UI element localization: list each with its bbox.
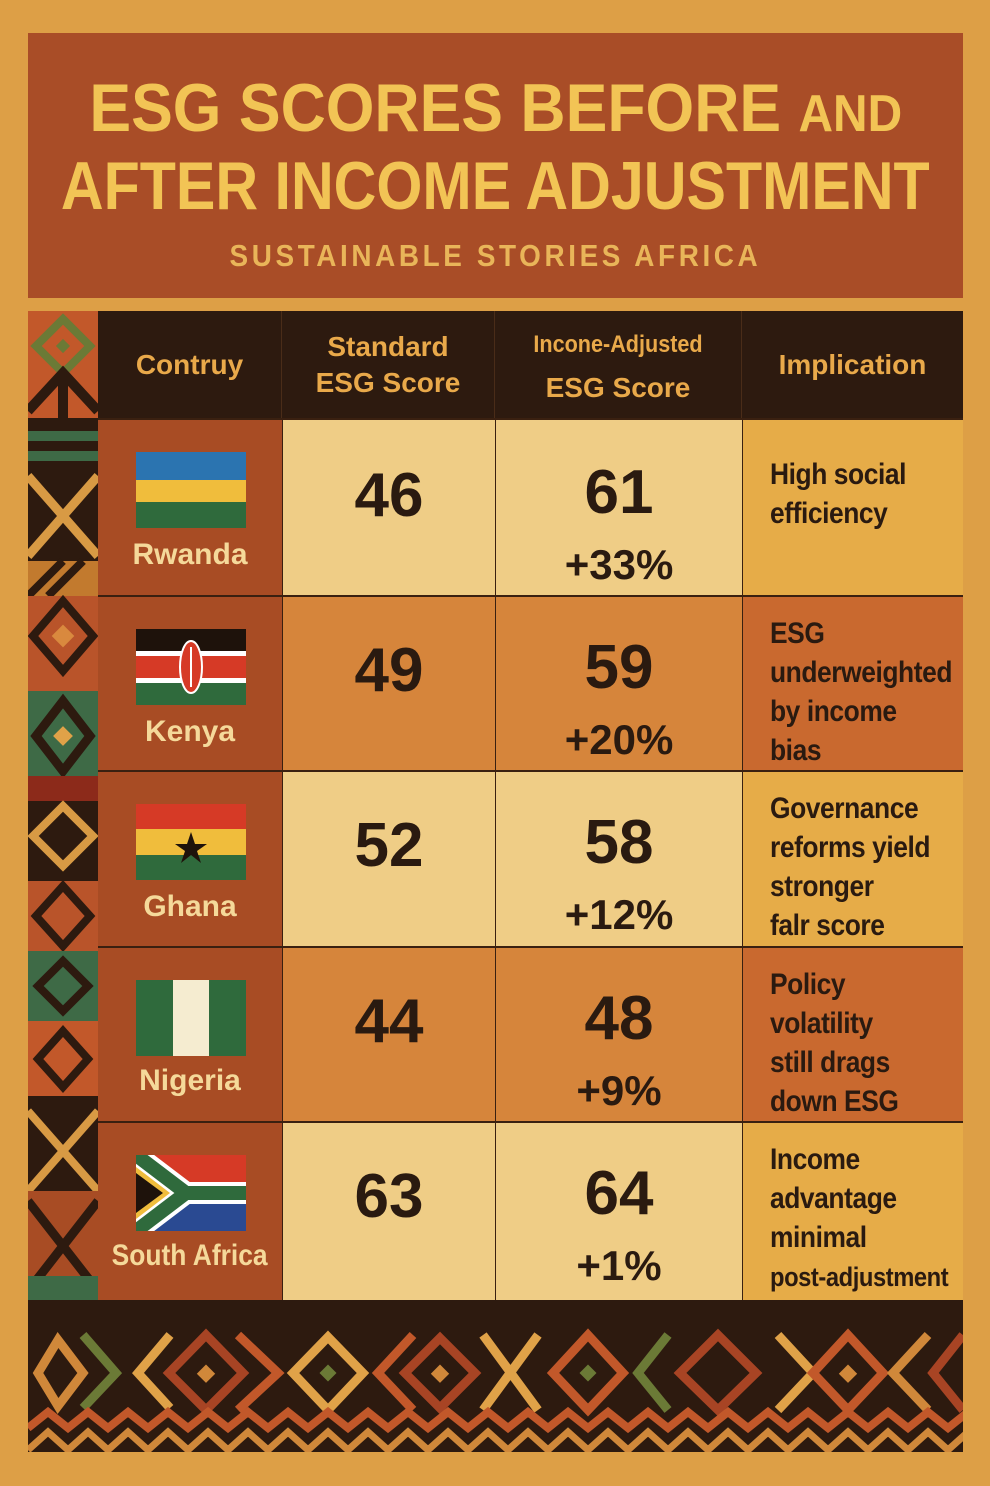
left pattern strip <box>28 311 98 1300</box>
row: South Africa <box>98 1121 963 1300</box>
header: implication: Implication <box>779 348 926 380</box>
row: Ghana: 52 <box>355 811 423 880</box>
row: Rwanda: Rwanda <box>132 538 248 571</box>
row: Ghana: Governance <box>770 792 918 825</box>
row: Ghana: +12% <box>565 891 673 938</box>
title: ESG SCORES BEFORE AND <box>89 70 902 146</box>
row: Kenya: Kenya <box>145 715 235 748</box>
bottom pattern band <box>28 1300 963 1452</box>
row: Nigeria: still drags <box>770 1046 890 1079</box>
row: Kenya: 59 <box>585 633 653 702</box>
header: income adjusted <box>495 311 742 418</box>
header: income adjusted: ESG Score <box>546 372 690 402</box>
row: Ghana: falr score <box>770 909 884 942</box>
row: Kenya <box>98 595 963 770</box>
row: Nigeria: 44 <box>355 987 423 1056</box>
title: AFTER INCOME ADJUSTMENT <box>61 148 930 224</box>
row: Ghana: stronger <box>770 870 874 903</box>
row: South Africa: 63 <box>355 1162 423 1231</box>
row: South Africa: South Africa <box>112 1239 268 1272</box>
row: Kenya: ESG <box>770 617 824 650</box>
row: Kenya: 49 <box>355 636 423 705</box>
row: Kenya: underweighted <box>770 656 952 689</box>
row: Rwanda: efficiency <box>770 497 887 530</box>
title <box>61 70 930 224</box>
row: South Africa: +1% <box>576 1242 662 1289</box>
row: Nigeria: down ESG <box>770 1085 898 1118</box>
row: Ghana: reforms yield <box>770 831 930 864</box>
row: Ghana <box>98 770 963 946</box>
flag: Rwanda <box>136 452 246 528</box>
row: Rwanda <box>98 418 963 595</box>
row: Nigeria: volatility <box>770 1007 873 1040</box>
row: Kenya: +20% <box>565 716 673 763</box>
header: standard: ESG Score <box>316 366 460 398</box>
row: South Africa: post-adjustment <box>770 1262 948 1292</box>
row: Nigeria: +9% <box>576 1067 662 1114</box>
flag: Ghana <box>136 804 246 880</box>
row: Ghana: 58 <box>585 808 653 877</box>
row: Nigeria <box>98 946 963 1121</box>
row: South Africa: minimal <box>770 1221 867 1254</box>
header: standard: Standard <box>327 330 449 362</box>
row: Nigeria: Policy <box>770 968 845 1001</box>
row: Kenya: by income <box>770 695 897 728</box>
row: Rwanda: +33% <box>565 541 673 588</box>
row: Rwanda: 61 <box>585 458 653 527</box>
row: Nigeria: 48 <box>585 984 653 1053</box>
row: Nigeria: Nigeria <box>139 1064 241 1097</box>
flag: Kenya <box>136 629 246 705</box>
row: South Africa: 64 <box>585 1159 653 1228</box>
title panel <box>28 33 963 298</box>
row: Rwanda: 46 <box>355 461 423 530</box>
header: income adjusted: Incone-Adjusted <box>533 330 703 358</box>
flag: Nigeria <box>136 980 246 1056</box>
header: country: Contruy <box>136 348 243 380</box>
header: standard <box>282 311 495 418</box>
row: Rwanda: High social <box>770 458 906 491</box>
row: South Africa: Income <box>770 1143 860 1176</box>
row: South Africa: advantage <box>770 1182 897 1215</box>
table header row <box>98 311 963 418</box>
header: implication <box>742 311 963 418</box>
row: Ghana: Ghana <box>143 890 237 923</box>
header: country <box>98 311 282 418</box>
subtitle: SUSTAINABLE STORIES AFRICA <box>230 238 761 273</box>
row: Kenya: bias <box>770 734 821 767</box>
flag: South Africa <box>136 1155 246 1231</box>
